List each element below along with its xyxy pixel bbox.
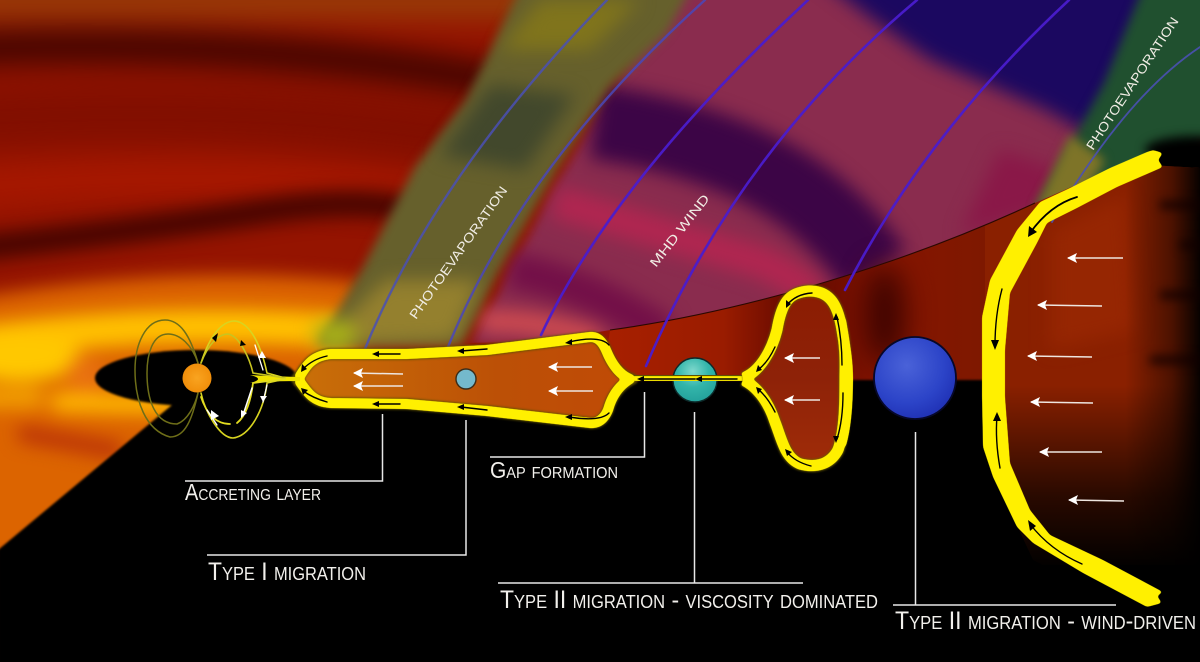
- icon: magnetic field loops: [135, 320, 285, 438]
- black arrowheads: [301, 226, 1037, 531]
- callout: accreting layer: Accreting layer: [185, 479, 321, 505]
- black flow arrows: [303, 197, 1082, 564]
- callout: type I migration: [207, 420, 466, 586]
- blue planet: [874, 337, 956, 419]
- callout: type II wind-driven: [893, 432, 1196, 635]
- photoevaporation band (outer): [1035, 0, 1200, 210]
- callout: type I migration: Type I migration: [208, 558, 366, 586]
- callout: type II viscosity dominated: [498, 412, 878, 614]
- MHD wind region: [470, 0, 1200, 345]
- callout: accreting layer: [185, 414, 382, 505]
- icon: central star: [182, 364, 212, 392]
- callout: gap formation: [490, 392, 644, 483]
- wind streamlines: [362, 0, 1200, 366]
- top right dark corner above the disc: [1150, 150, 1200, 170]
- wide yellow layer: wind-driven: [982, 150, 1163, 607]
- callout: gap formation: Gap formation: [490, 457, 618, 483]
- disc surface line: [610, 203, 1035, 330]
- label: photoevaporation outer: PHOTOEVAPORATION: [1083, 14, 1182, 153]
- callout: type II viscosity dominated: Type II migration - viscosity dominated: [500, 586, 878, 614]
- black shadow below the disc: [0, 350, 1200, 662]
- label: MHD wind: MHD WIND: [647, 191, 713, 270]
- type I planet: [456, 369, 476, 389]
- outer disc body: [600, 140, 1200, 662]
- white inward flow arrows: [354, 258, 1124, 501]
- inner disc: type I migration region: [297, 337, 632, 423]
- gap region: viscosity dominated: [743, 291, 849, 466]
- teal planet: [630, 358, 745, 402]
- inner accretion neck: [250, 375, 300, 383]
- photoevaporation band (inner): [313, 0, 696, 351]
- label: photoevaporation inner: PHOTOEVAPORATION: [406, 183, 510, 322]
